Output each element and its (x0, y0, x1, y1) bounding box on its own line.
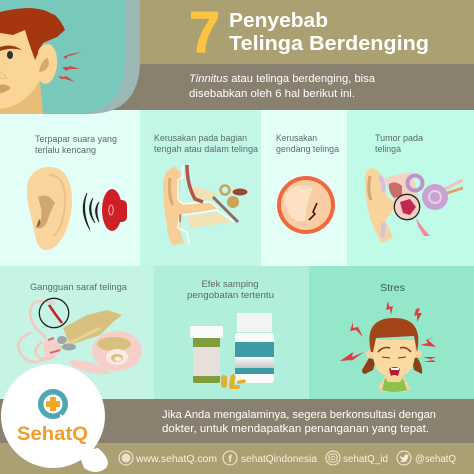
text: closing message: Jika Anda mengalaminya, segera berkonsultasi dengan (162, 409, 436, 421)
text: intro (189, 73, 376, 100)
footer: instagram (326, 451, 388, 465)
footer: facebook: sehatQindonesia (241, 454, 317, 465)
text: closing message: dokter, untuk mendapatkan penanganan yang tepat. (162, 423, 429, 435)
text: cause 6 label: Efek samping (202, 279, 258, 289)
text: cause 5 label: Gangguan saraf telinga (30, 282, 128, 292)
icon: capsules (221, 374, 246, 389)
icon: magnifier plus (38, 389, 68, 419)
panel: cause 1 background (0, 110, 140, 266)
panel: cause 2 background (140, 110, 261, 266)
heading: title line 2: Telinga Berdenging (229, 33, 429, 55)
panel: cause 6 background (154, 266, 309, 399)
icon: ringing bolts (58, 52, 82, 82)
text: cause 4 label: telinga (375, 144, 402, 154)
illustration: auditory nerve (18, 298, 142, 374)
panel: cause 4 background (347, 110, 474, 266)
text: cause 2 label: Kerusakan pada bagian (154, 133, 247, 143)
illustration: man with ringing ear (0, 8, 82, 114)
illustration: stressed girl (340, 301, 436, 392)
footer: instagram: sehatQ_id (343, 454, 388, 465)
icon: small bottle (190, 326, 223, 383)
illustration: medicine bottles (190, 313, 274, 389)
text: cause 4 label (375, 133, 424, 154)
text: cause 6 label: pengobatan tertentu (187, 290, 274, 300)
icon: facebook: f (228, 454, 232, 465)
footer: twitter (397, 451, 456, 465)
text: logo wordmark: SehatQ (17, 424, 88, 445)
text: cause 1 label: Terpapar suara yang (35, 134, 117, 144)
text: cause 7 label: Stres (380, 282, 405, 294)
footer: website: www.sehatQ.com (135, 454, 217, 465)
panel: closing dark band (0, 399, 474, 443)
panel: header teal curve (0, 0, 125, 114)
text: cause 4 label: Tumor pada (375, 133, 424, 143)
illustration: outer ear (27, 167, 72, 250)
icon: loudspeaker with sound waves (83, 189, 127, 231)
footer: twitter: @sehatQ (415, 454, 456, 465)
icon: large bottle (235, 313, 274, 383)
text: cause 6 label (187, 279, 274, 300)
illustration: middle and inner ear cross-section (163, 165, 248, 245)
logo: SehatQ badge (1, 364, 108, 472)
illustration: ear with tumor (365, 168, 463, 243)
panel: cause 3 background (261, 110, 347, 266)
icon: globe (119, 451, 133, 465)
text: cause 1 label (35, 134, 117, 155)
footer: facebook (223, 451, 317, 465)
footer: website (119, 451, 217, 465)
text: intro: Tinnitus atau telinga berdenging, bisa (189, 73, 376, 85)
text: cause 3 label: gendang telinga (276, 144, 340, 154)
icon: twitter (397, 451, 411, 465)
text: closing message (162, 409, 436, 435)
panel: header grey curve (0, 0, 140, 114)
text: cause 2 label (154, 133, 259, 154)
text: cause 2 label: tengah atau dalam telinga (154, 144, 259, 154)
panel: cause 7 background (309, 266, 474, 399)
illustration: damaged eardrum (277, 176, 335, 234)
text: cause 3 label: Kerusakan (276, 133, 317, 143)
heading: title line 1: Penyebab (229, 10, 328, 32)
icon: stress bolts (340, 301, 436, 362)
icon: instagram (326, 451, 340, 465)
text: cause 1 label: terlalu kencang (35, 145, 96, 155)
text: cause 3 label (276, 133, 340, 154)
text: intro: disebabkan oleh 6 hal berikut ini. (189, 88, 355, 100)
panel: footer olive band (0, 443, 474, 474)
panel: cause 5 background (0, 266, 154, 399)
panel: intro dark band (100, 64, 474, 110)
panel: header olive band (130, 0, 474, 64)
heading: number 7: 7 (189, 0, 220, 65)
